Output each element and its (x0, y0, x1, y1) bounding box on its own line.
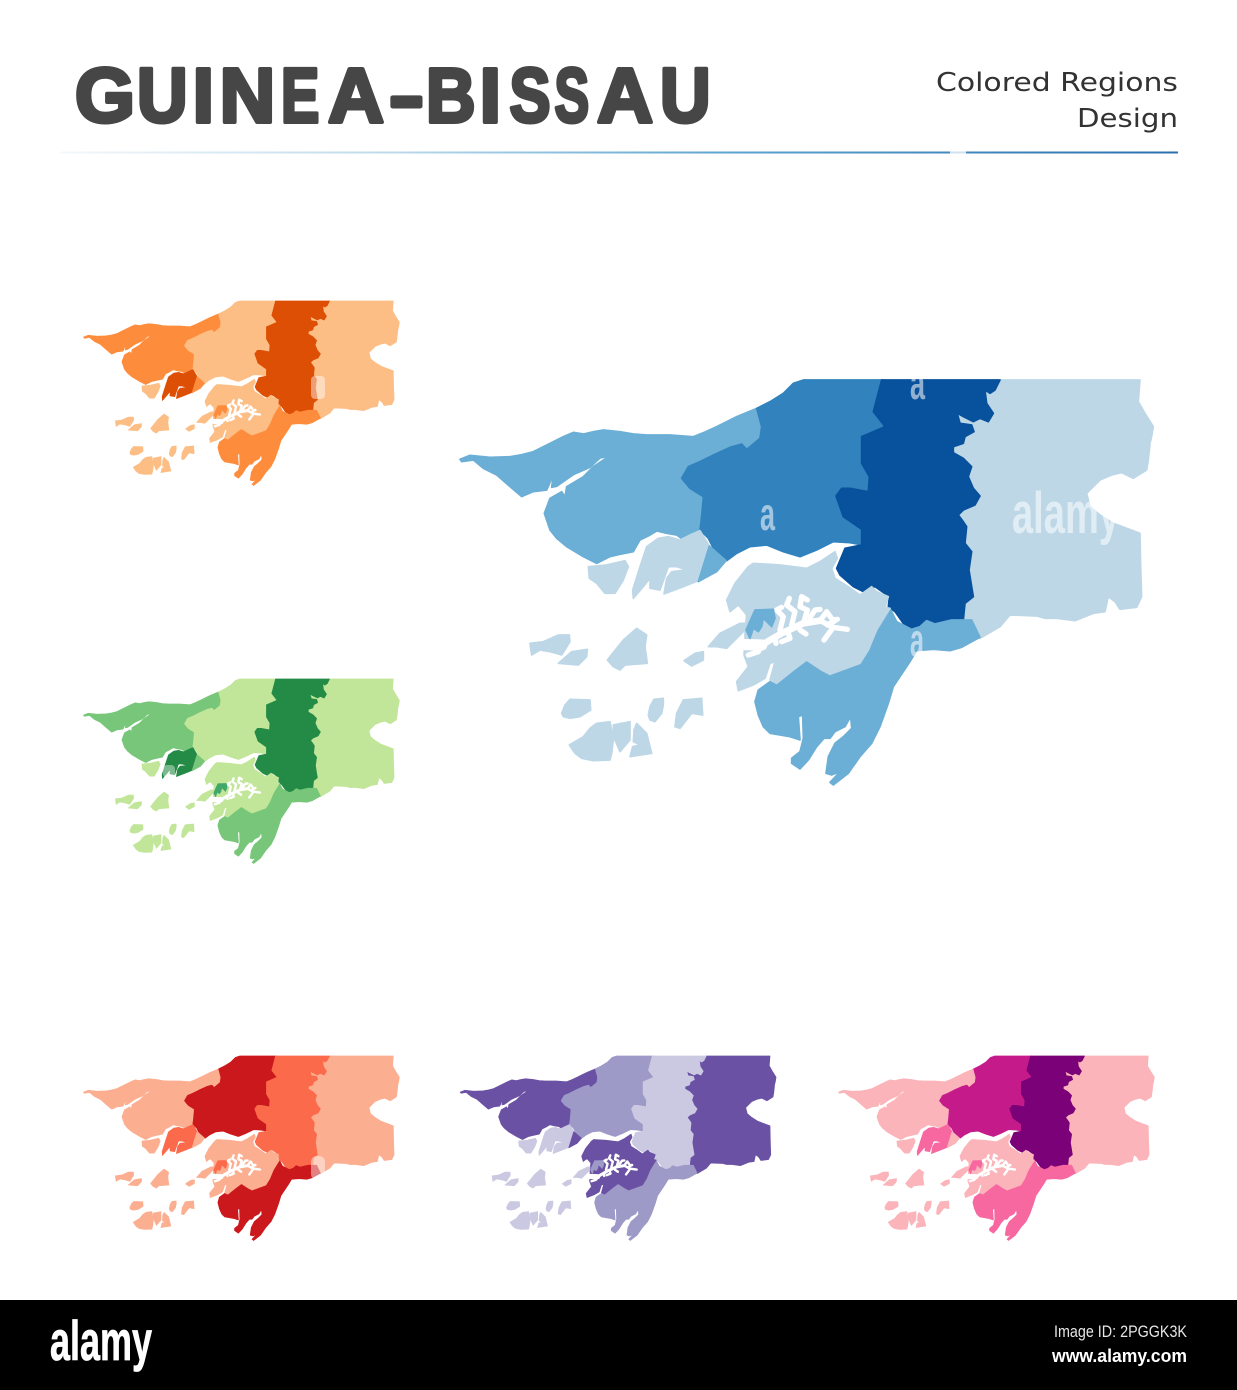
title: - (389, 53, 424, 139)
region: central peninsula (727, 552, 890, 691)
subtitle: Colored Regions (936, 68, 1178, 98)
watermark patch on orange map (311, 376, 325, 399)
title: N (220, 53, 275, 139)
estuary channels (733, 597, 847, 655)
watermark on large map: a (910, 614, 924, 666)
region: upper islands lobe (633, 531, 709, 598)
green map (84, 679, 399, 863)
title: U (660, 53, 711, 139)
red map (84, 1056, 399, 1240)
website: www.alamy.com (1051, 1346, 1187, 1366)
region: estuary inset (746, 609, 775, 638)
title: A (597, 53, 653, 139)
purple map (460, 1056, 776, 1240)
subtitle (936, 68, 1178, 134)
region: capital (698, 546, 726, 582)
footer logo: alamy (50, 1309, 152, 1372)
title: S (510, 53, 550, 139)
title: I (193, 53, 214, 139)
title: B (426, 53, 476, 139)
watermark on large map (760, 357, 1120, 666)
title: E (281, 53, 319, 139)
title: U (137, 53, 188, 139)
region: northwest coast (460, 408, 762, 563)
orange map (84, 301, 399, 485)
title: A (328, 53, 384, 139)
title: I (480, 53, 501, 139)
region: south (755, 608, 980, 785)
title: G (75, 53, 135, 139)
region: north centre (682, 380, 885, 561)
title: S (554, 53, 589, 139)
watermark patch on green map (163, 765, 175, 778)
watermark on large map: a (760, 488, 775, 540)
islands (530, 561, 745, 761)
subtitle: Design (1077, 104, 1178, 134)
watermark on large map: a (910, 357, 925, 409)
region: central dark band (836, 380, 1000, 630)
image id: Image ID: 2PGGK3K (1054, 1322, 1188, 1341)
pink map (839, 1056, 1154, 1240)
large blue map (460, 380, 1153, 785)
watermark on large map: alamy (1012, 481, 1120, 546)
watermark patch on red map (311, 1156, 325, 1180)
region: east (953, 380, 1153, 638)
footer bar (0, 1300, 1237, 1390)
